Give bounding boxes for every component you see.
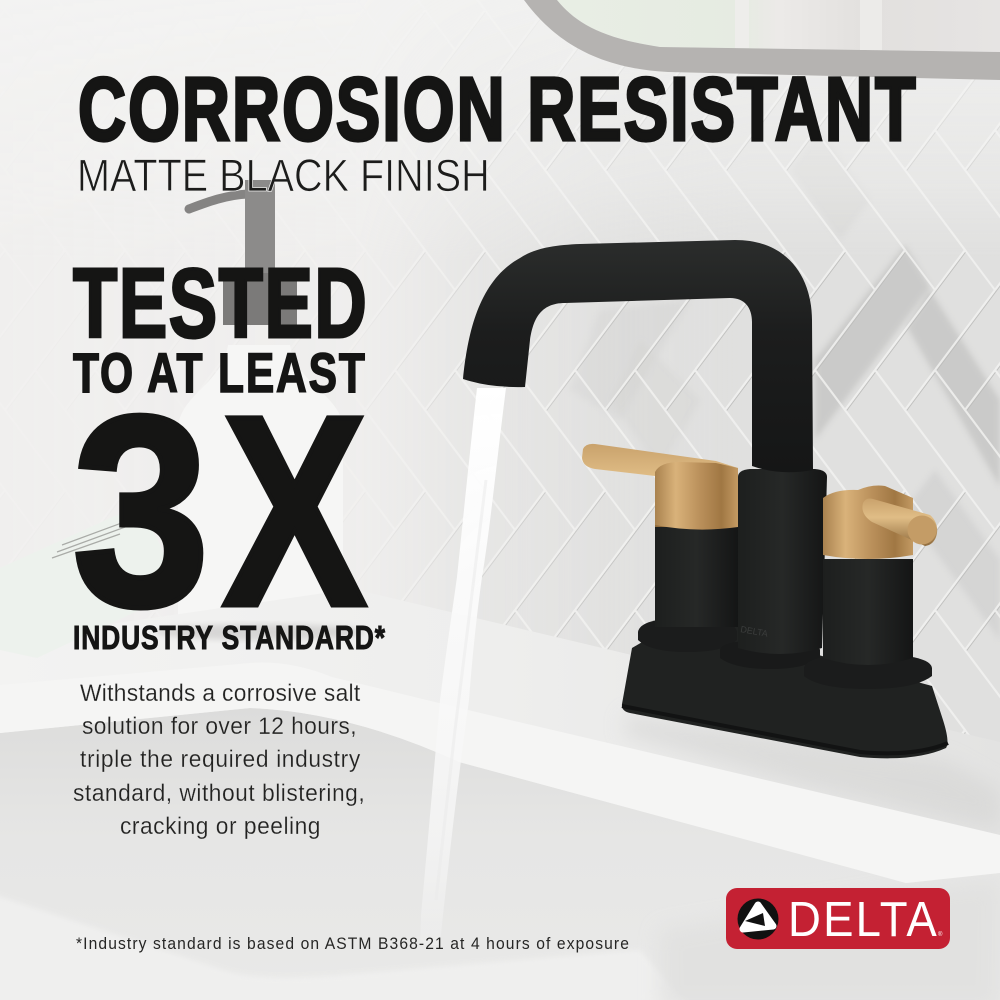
left valve (582, 444, 738, 652)
Delta logo: DELTA (788, 893, 937, 947)
body description: Withstands a corrosive salt (80, 679, 361, 706)
tube on counter (0, 514, 166, 658)
headline: tested: TESTED (73, 249, 367, 359)
spout (463, 240, 813, 472)
vanity countertop (0, 590, 1000, 880)
sink basin (0, 663, 1000, 1000)
body description: triple the required industry (80, 745, 361, 772)
Delta logo: ® (938, 931, 943, 938)
background: tiled wall (0, 0, 1000, 800)
centre body: DELTA (740, 624, 769, 639)
title: CORROSION RESISTANT (78, 58, 916, 159)
body description (73, 679, 365, 839)
mirror in upper right (524, 0, 1000, 80)
headline: to at least: TO AT LEAST (73, 341, 365, 404)
body description: solution for over 12 hours, (82, 712, 357, 739)
subtitle: MATTE BLACK FINISH (77, 151, 490, 201)
headline: industry standard: INDUSTRY STANDARD* (73, 620, 385, 657)
faucet (463, 240, 948, 758)
footnote: *Industry standard is based on ASTM B368-21 at 4 hours of exposure (76, 934, 629, 953)
right valve (804, 486, 937, 689)
body description: cracking or peeling (120, 812, 320, 839)
soap dispenser, faded (178, 180, 343, 629)
faucet base plate (622, 610, 947, 758)
big stat: 3X: X (222, 359, 368, 663)
stream of water (420, 388, 506, 945)
icon: Delta triangle mark (738, 898, 778, 940)
Delta logo (726, 888, 950, 949)
big stat: 3X (72, 359, 368, 663)
body description: standard, without blistering, (73, 779, 365, 806)
centre body (720, 469, 827, 669)
big stat: 3X: 3 (72, 359, 210, 663)
